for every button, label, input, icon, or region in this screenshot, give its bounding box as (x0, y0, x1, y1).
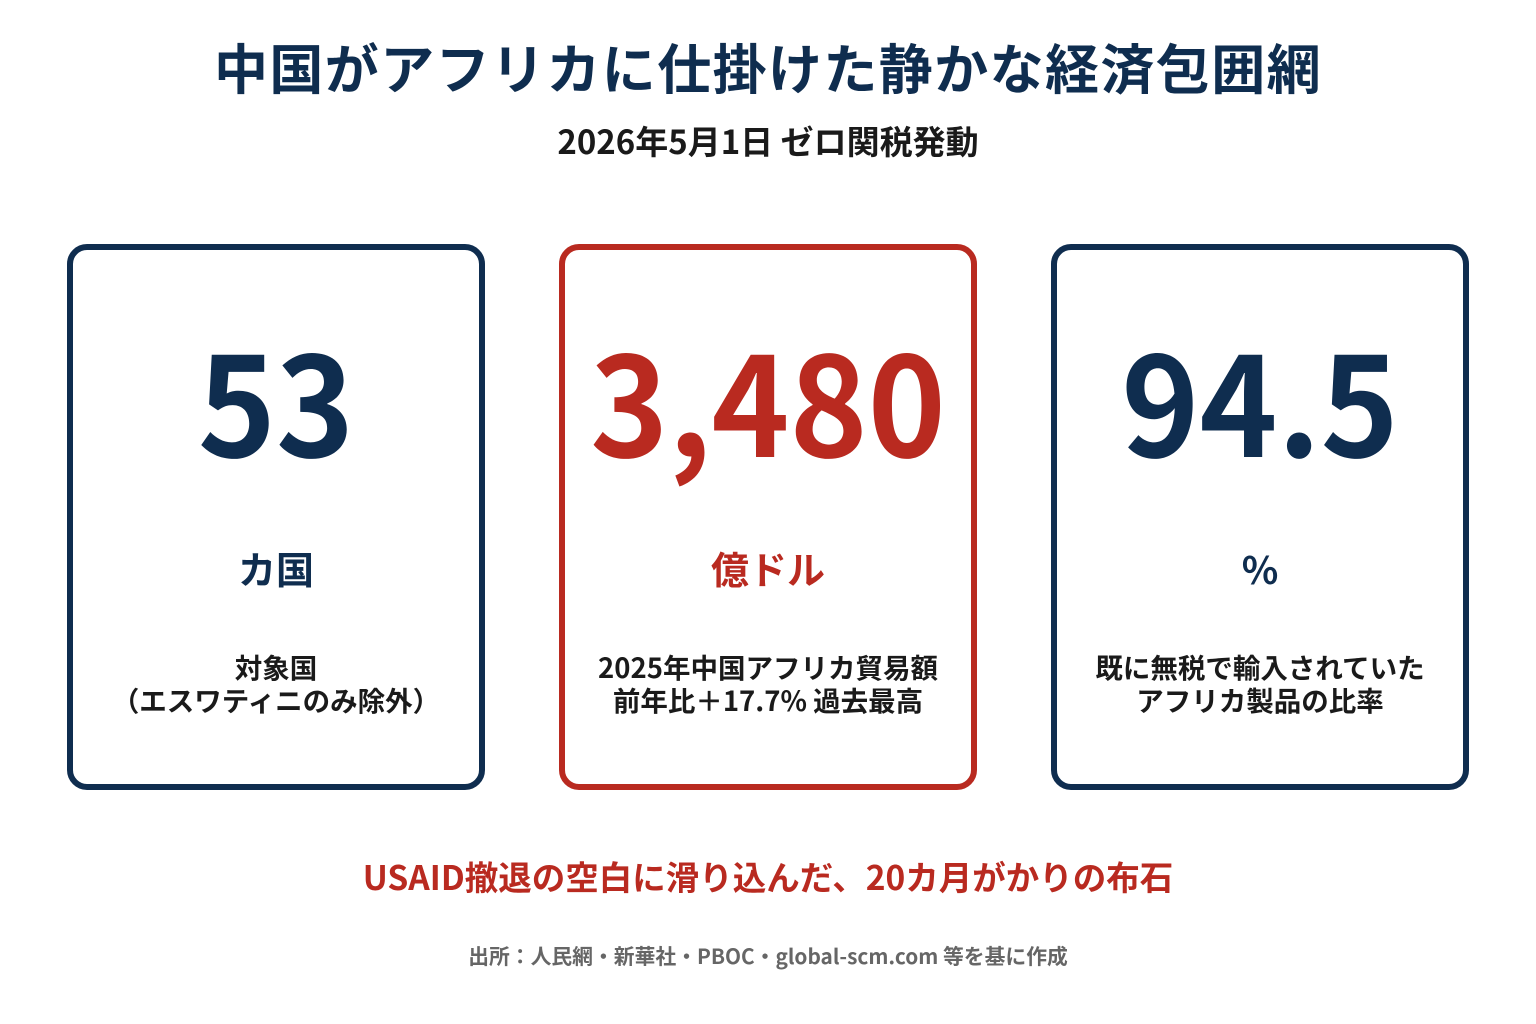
unit: 100 million dollars: 億ドル (711, 540, 825, 595)
source note: 出所：人民網・新華社・PBOC・global-scm.com 等を基に作成 (468, 940, 1068, 970)
number: 94.5: 94.5 (1121, 297, 1399, 497)
unit: countries: カ国 (238, 540, 314, 595)
description: trade value: 前年比＋17.7% 過去最高 (613, 679, 923, 719)
description: target countries: 対象国 (235, 646, 317, 686)
panel: 348 billion dollars (559, 244, 977, 790)
panel: 53 countries (67, 244, 485, 790)
number: 53: 53 (198, 297, 354, 497)
description: duty free share: 既に無税で輸入されていた (1095, 646, 1425, 686)
description: trade value (598, 646, 938, 719)
description: duty free share: アフリカ製品の比率 (1136, 679, 1384, 719)
title: 中国がアフリカに仕掛けた静かな経済包囲網 (214, 26, 1322, 105)
description: target countries (112, 646, 440, 719)
description: duty free share (1095, 646, 1425, 719)
description: trade value: 2025年中国アフリカ貿易額 (598, 646, 938, 686)
description: target countries: （エスワティニのみ除外） (112, 679, 440, 719)
subtitle: 2026年5月1日 ゼロ関税発動 (557, 116, 979, 164)
panel: 94.5 percent (1051, 244, 1469, 790)
unit: percent: % (1242, 540, 1278, 595)
number: 3,480: 3,480 (590, 297, 946, 497)
callout: USAID撤退の空白に滑り込んだ、20カ月がかりの布石 (363, 851, 1173, 900)
